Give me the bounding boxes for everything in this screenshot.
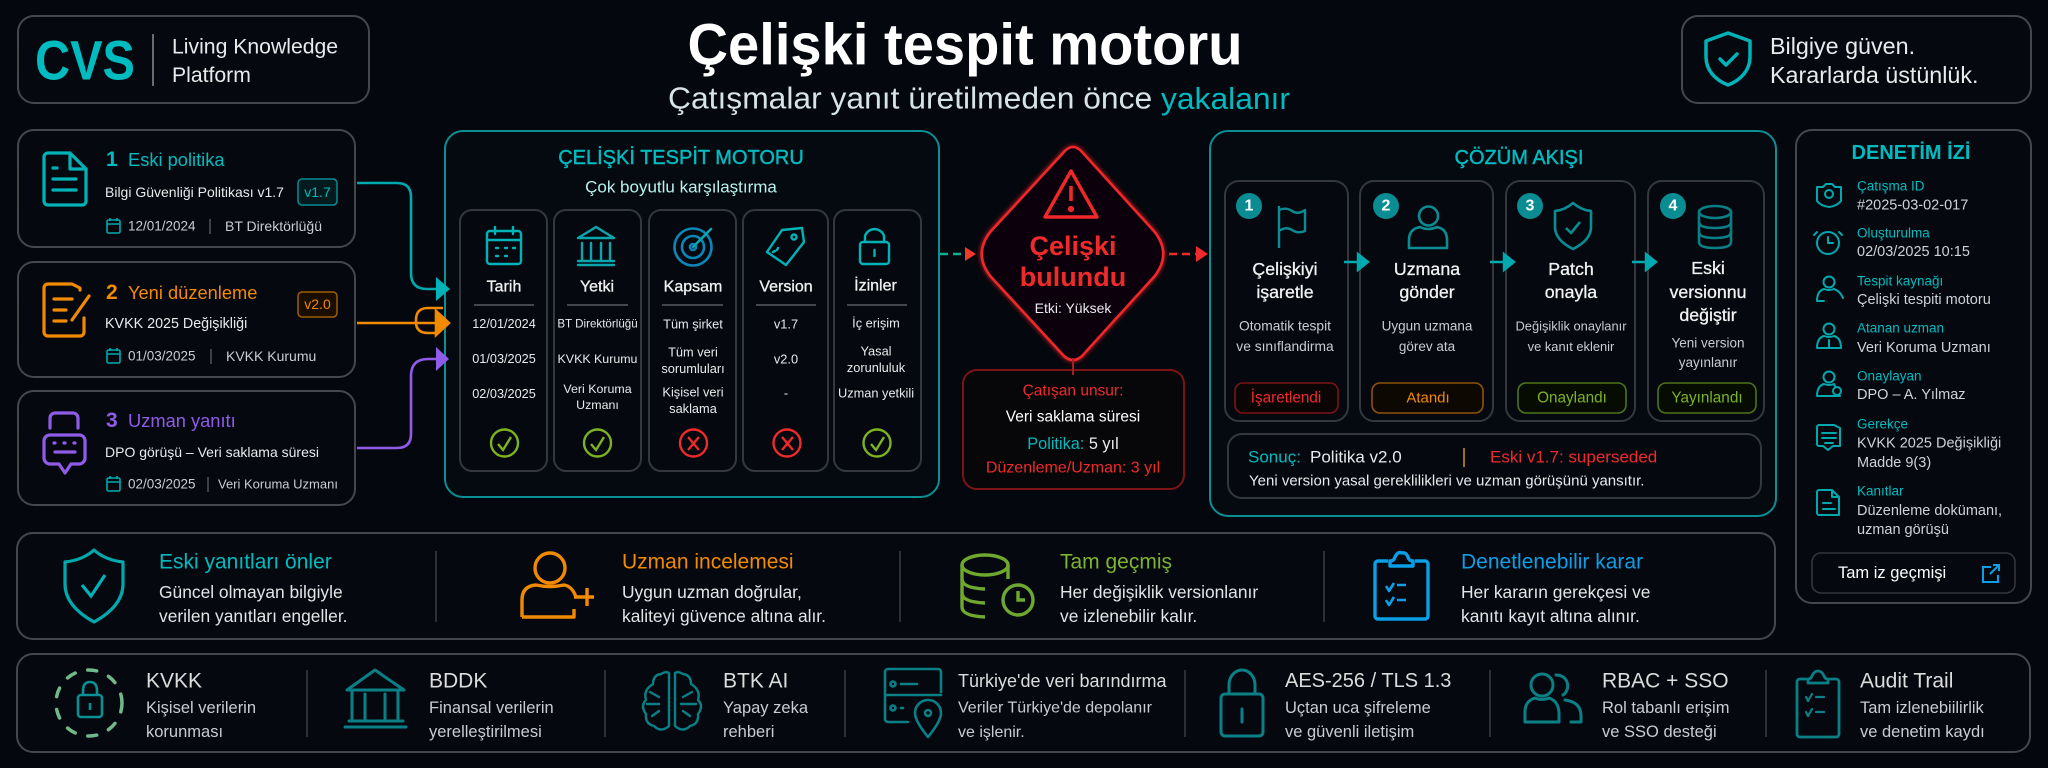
logo box [18,16,369,103]
version badge: v1.7 [304,184,331,200]
heading: Eski politika [128,148,225,170]
column: Yetki: Uzmanı [576,398,619,412]
icon: document pen [44,284,89,336]
compliance: encryption: AES-256 / TLS 1.3 [1285,670,1451,692]
benefit: prevents stale answers: Eski yanıtları önler [159,550,332,574]
column: Yetki: BT Direktörlüğü [557,318,638,330]
status pill [1235,383,1338,413]
compliance: RBAC: ve SSO desteği [1602,723,1717,741]
result box [1228,434,1761,498]
column: İzinler: Uzman yetkili [838,386,914,400]
column: Kapsam: Tüm veri [668,344,718,360]
compliance: data residency: Türkiye'de veri barındırma [958,671,1168,691]
heading: 1 [106,148,118,170]
column: Tarih [460,210,547,471]
button: full trail: Tam iz geçmişi [1838,564,1946,582]
status pill [1372,383,1483,413]
compliance: encryption [1221,670,1451,741]
status: fail [774,430,800,456]
compliance: BTK AI [643,670,809,741]
source card 1: Eski politika [18,130,355,247]
arrow: step 1 to 2 [1344,254,1368,270]
result box: Politika v2.0 [1310,448,1402,466]
compliance: BDDK [345,670,554,741]
source card 2: Yeni düzenleme [18,262,355,377]
audit heading: DENETİM İZİ [1852,141,1970,164]
arrow: step 2 to 3 [1490,254,1514,270]
step 3: onayla [1545,282,1597,302]
item: justification: KVKK 2025 Değişikliği [1857,436,2001,452]
step 1: Otomatik tespit [1239,318,1331,334]
compliance: KVKK: korunması [146,723,223,741]
step 4: Eski [1691,258,1725,278]
status pill: Yayınlandı [1671,390,1743,406]
column: İzinler: zorunluluk [847,360,906,374]
benefit: prevents stale answers: verilen yanıtları engeller. [159,606,348,626]
column: Kapsam [649,210,736,471]
date row: KVKK Kurumu [226,348,316,364]
column: Version: v2.0 [774,352,798,366]
arrow: dashed conflict to resolution [1169,246,1208,262]
column: Version [743,210,828,471]
arrow: dashed engine to conflict [940,247,976,261]
step 3: Patch [1548,259,1594,279]
step 1: ve sınıflandirma [1236,338,1334,354]
column: Tarih: 01/03/2025 [472,352,536,366]
column: Kapsam: sorumluları [661,360,725,376]
benefit: full history: Tam geçmiş [1060,550,1172,574]
result box: Yeni version yasal gereklilikleri ve uzman görüşünü yansıtır. [1249,472,1644,490]
icon: warning triangle [1045,171,1097,217]
step 3: Değişiklik onaylanır [1515,318,1627,334]
step 4: Yeni version [1671,336,1745,350]
panel subheading: Çok boyutlu karşılaştırma [585,178,777,196]
icon: calendar [487,227,521,264]
date row: 02/03/2025 [128,476,196,492]
status: pass [864,430,890,456]
arrow: step 3 to 4 [1632,254,1656,270]
compliance: RBAC: Rol tabanlı erişim [1602,699,1729,717]
step 4 [1648,181,1764,421]
column: İzinler: Yasal [860,344,892,358]
logo tagline: Platform [172,64,251,86]
tagline text: Kararlarda üstünlük. [1770,62,1978,88]
item: justification [1817,416,2001,471]
compliance: KVKK: KVKK [146,670,202,692]
version badge [298,179,337,205]
column: İzinler: İzinler [854,276,898,294]
column: Yetki [554,210,641,471]
item: created: Oluşturulma [1857,226,1930,240]
status pill [1518,383,1626,413]
status pill: İşaretlendi [1251,388,1321,406]
arrow: orange from card 2 [357,308,449,335]
step 3: ve kanıt eklenir [1528,338,1615,354]
column: Yetki: KVKK Kurumu [558,352,638,366]
item: conflict ID: #2025-03-02-017 [1857,198,1968,214]
step 1: Çelişkiyi [1252,259,1318,279]
compliance: KVKK: Kişisel verilerin [146,699,256,717]
compliance: encryption: Uçtan uca şifreleme [1285,699,1431,717]
logo: CVS: CVS [35,28,135,92]
document name: KVKK 2025 Değişikliği [105,316,247,332]
icon: lock [860,229,889,264]
date row: 01/03/2025 [128,348,196,364]
status: fail [680,430,707,456]
step 4: değiştir [1679,305,1737,325]
benefit: expert review [522,550,826,626]
item: detection source: Çelişki tespiti motoru [1857,292,1991,308]
benefit: auditable decision: Denetlenebilir karar [1461,550,1643,574]
column: Version: Version [759,278,813,296]
icon: person [1409,206,1447,248]
compliance: encryption: ve güvenli iletişim [1285,723,1414,741]
step 1: 1 [1245,198,1254,214]
heading: Uzman yanıtı [128,410,236,430]
conflict detail box: Veri saklama süresi [1006,408,1140,426]
conflict detail box: Çatışan unsur: [1023,382,1123,400]
benefit: auditable decision: Her kararın gerekçesi ve [1461,582,1650,602]
item: assigned expert [1817,320,1991,356]
panel: engine [445,131,939,497]
date row: BT Direktörlüğü [225,218,322,234]
step 2: 2 [1382,198,1391,214]
title: Çelişki tespit motoru [688,12,1242,78]
version badge: v2.0 [304,296,331,312]
step 2 [1360,181,1493,421]
subtitle: Çatışmalar yanıt üretilmeden önce yakalanır [668,80,1290,116]
date row: Veri Koruma Uzmanı [218,476,338,492]
item: approver [1817,368,1966,403]
compliance: RBAC: RBAC + SSO [1602,670,1729,692]
icon: external link [1983,565,1999,582]
status pill: Onaylandı [1537,390,1607,406]
compliance: audit trail: Tam izlenebiilirlik [1860,699,1984,717]
benefit: expert review: Uzman incelemesi [622,550,794,574]
status: pass [584,430,611,456]
icon: speech bubble [44,413,85,473]
item: evidence: Düzenleme dokümanı, [1857,503,2002,519]
column: Version: - [784,386,788,400]
icon: database [1699,206,1731,248]
step 1 [1225,181,1348,421]
compliance: BTK AI: Yapay zeka [723,699,808,717]
panel heading: ÇELİŞKİ TESPİT MOTORU [558,146,804,169]
tagline box [1682,16,2031,103]
heading: Yeni düzenleme [128,282,257,302]
item: assigned expert: Atanan uzman [1857,320,1944,336]
version badge [298,292,337,317]
document name: Bilgi Güvenliği Politikası v1.7 [105,184,284,200]
heading: 3 [106,408,118,432]
compliance: data residency [885,669,1168,740]
item: approver: DPO – A. Yılmaz [1857,387,1966,403]
compliance: BDDK: Finansal verilerin [429,699,554,717]
conflict heading: Çelişki [1029,231,1117,261]
step 3: 3 [1526,198,1535,214]
conflict detail box [963,358,1184,489]
icon: document [44,153,86,205]
panel heading: ÇÖZÜM AKIŞI [1455,147,1583,169]
benefits bar [17,533,1775,639]
tagline text: Bilgiye güven. [1770,33,1915,59]
compliance: audit trail [1797,670,1985,741]
column: Tarih: 02/03/2025 [472,387,536,401]
benefit: expert review: kaliteyi güvence altına alır. [622,606,826,626]
step 4: 4 [1669,198,1678,214]
icon: shield [1555,203,1591,249]
source card 3: Uzman yanıtı [18,391,355,505]
date row [107,476,338,492]
column: İzinler [834,210,921,471]
status pill [1658,383,1756,413]
date row [107,348,316,364]
result box: Eski v1.7: superseded [1490,448,1657,466]
step 2: görev ata [1399,338,1456,354]
icon: institution [578,227,614,265]
compliance: BTK AI: rehberi [723,723,774,741]
date row [107,218,322,234]
compliance: data residency: Veriler Türkiye'de depolanır [958,700,1152,716]
date row: 12/01/2024 [128,218,196,234]
item: created [1814,226,1970,260]
item: justification: Madde 9(3) [1857,455,1931,471]
conflict detail box: Politika: 5 yıl [1027,435,1119,453]
item: approver: Onaylayan [1857,368,1922,384]
icon: tag [767,228,804,265]
compliance: data residency: ve işlenir. [958,724,1025,740]
item: created: 02/03/2025 10:15 [1857,244,1970,260]
icon: shield check [1706,33,1750,85]
benefit: expert review: Uygun uzman doğrular, [622,582,802,602]
compliance: KVKK [56,670,256,741]
column: Tarih: 12/01/2024 [472,317,536,331]
benefit: full history [962,550,1258,626]
document name: DPO görüşü – Veri saklama süresi [105,444,319,460]
benefit: full history: ve izlenebilir kalır. [1060,606,1197,626]
panel: audit trail [1796,130,2031,603]
column: Kapsam: Kişisel veri [662,384,724,400]
result box: Sonuç: [1248,448,1301,466]
status: pass [491,430,518,456]
compliance: audit trail: ve denetim kaydı [1860,723,1985,741]
compliance: audit trail: Audit Trail [1860,670,1953,692]
heading: 2 [106,280,118,304]
conflict detail box: Düzenleme/Uzman: 3 yıl [986,460,1160,476]
compliance bar [17,654,2030,752]
benefit: auditable decision [1375,550,1650,626]
step 4: versionnu [1669,282,1747,302]
column: Kapsam: Tüm şirket [663,316,723,332]
benefit: prevents stale answers: Güncel olmayan bilgiyle [159,582,343,602]
status pill: Atandı [1406,390,1450,406]
benefit: auditable decision: kanıtı kayıt altına alınır. [1461,606,1640,626]
arrow: purple from card 3 [357,347,449,448]
item: detection source: Tespit kaynağı [1857,274,1943,288]
button: full trail [1812,553,2015,593]
item: evidence [1817,484,2002,538]
item: conflict ID [1817,178,1968,214]
column: Kapsam: saklama [669,400,718,416]
impact: Etki: Yüksek [1035,300,1112,316]
icon: flag [1279,206,1305,248]
icon: target [674,228,712,266]
compliance: RBAC [1525,670,1729,741]
column: Yetki: Veri Koruma [563,382,632,396]
step 4: yayınlanır [1679,354,1738,370]
item: evidence: Kanıtlar [1857,484,1904,498]
arrow: teal from card 1 [357,183,450,301]
column: Yetki: Yetki [580,278,614,296]
panel: resolution flow [1210,131,1776,516]
step 2: Uzmana [1394,259,1460,279]
conflict diamond: bulundu [1020,262,1126,292]
step 1: işaretle [1256,282,1314,302]
conflict diamond [982,147,1163,360]
compliance: BDDK: BDDK [429,670,487,692]
compliance: BTK AI: BTK AI [723,670,788,692]
item: conflict ID: Çatışma ID [1857,178,1925,194]
step 2: Uygun uzmana [1382,318,1472,334]
logo tagline: Living Knowledge [172,36,338,58]
benefit: prevents stale answers [65,550,348,626]
column: Version: v1.7 [774,316,798,332]
item: justification: Gerekçe [1857,416,1908,432]
item: evidence: uzman görüşü [1857,522,1949,538]
column: İzinler: İç erişim [852,316,900,330]
item: assigned expert: Veri Koruma Uzmanı [1857,340,1991,356]
compliance: BDDK: yerelleştirilmesi [429,723,542,741]
step 2: gönder [1399,282,1455,302]
column: Kapsam: Kapsam [664,278,722,296]
step 3 [1506,181,1635,421]
column: Tarih: Tarih [487,278,521,296]
item: detection source [1817,274,1991,308]
benefit: full history: Her değişiklik versionlanır [1060,582,1258,602]
